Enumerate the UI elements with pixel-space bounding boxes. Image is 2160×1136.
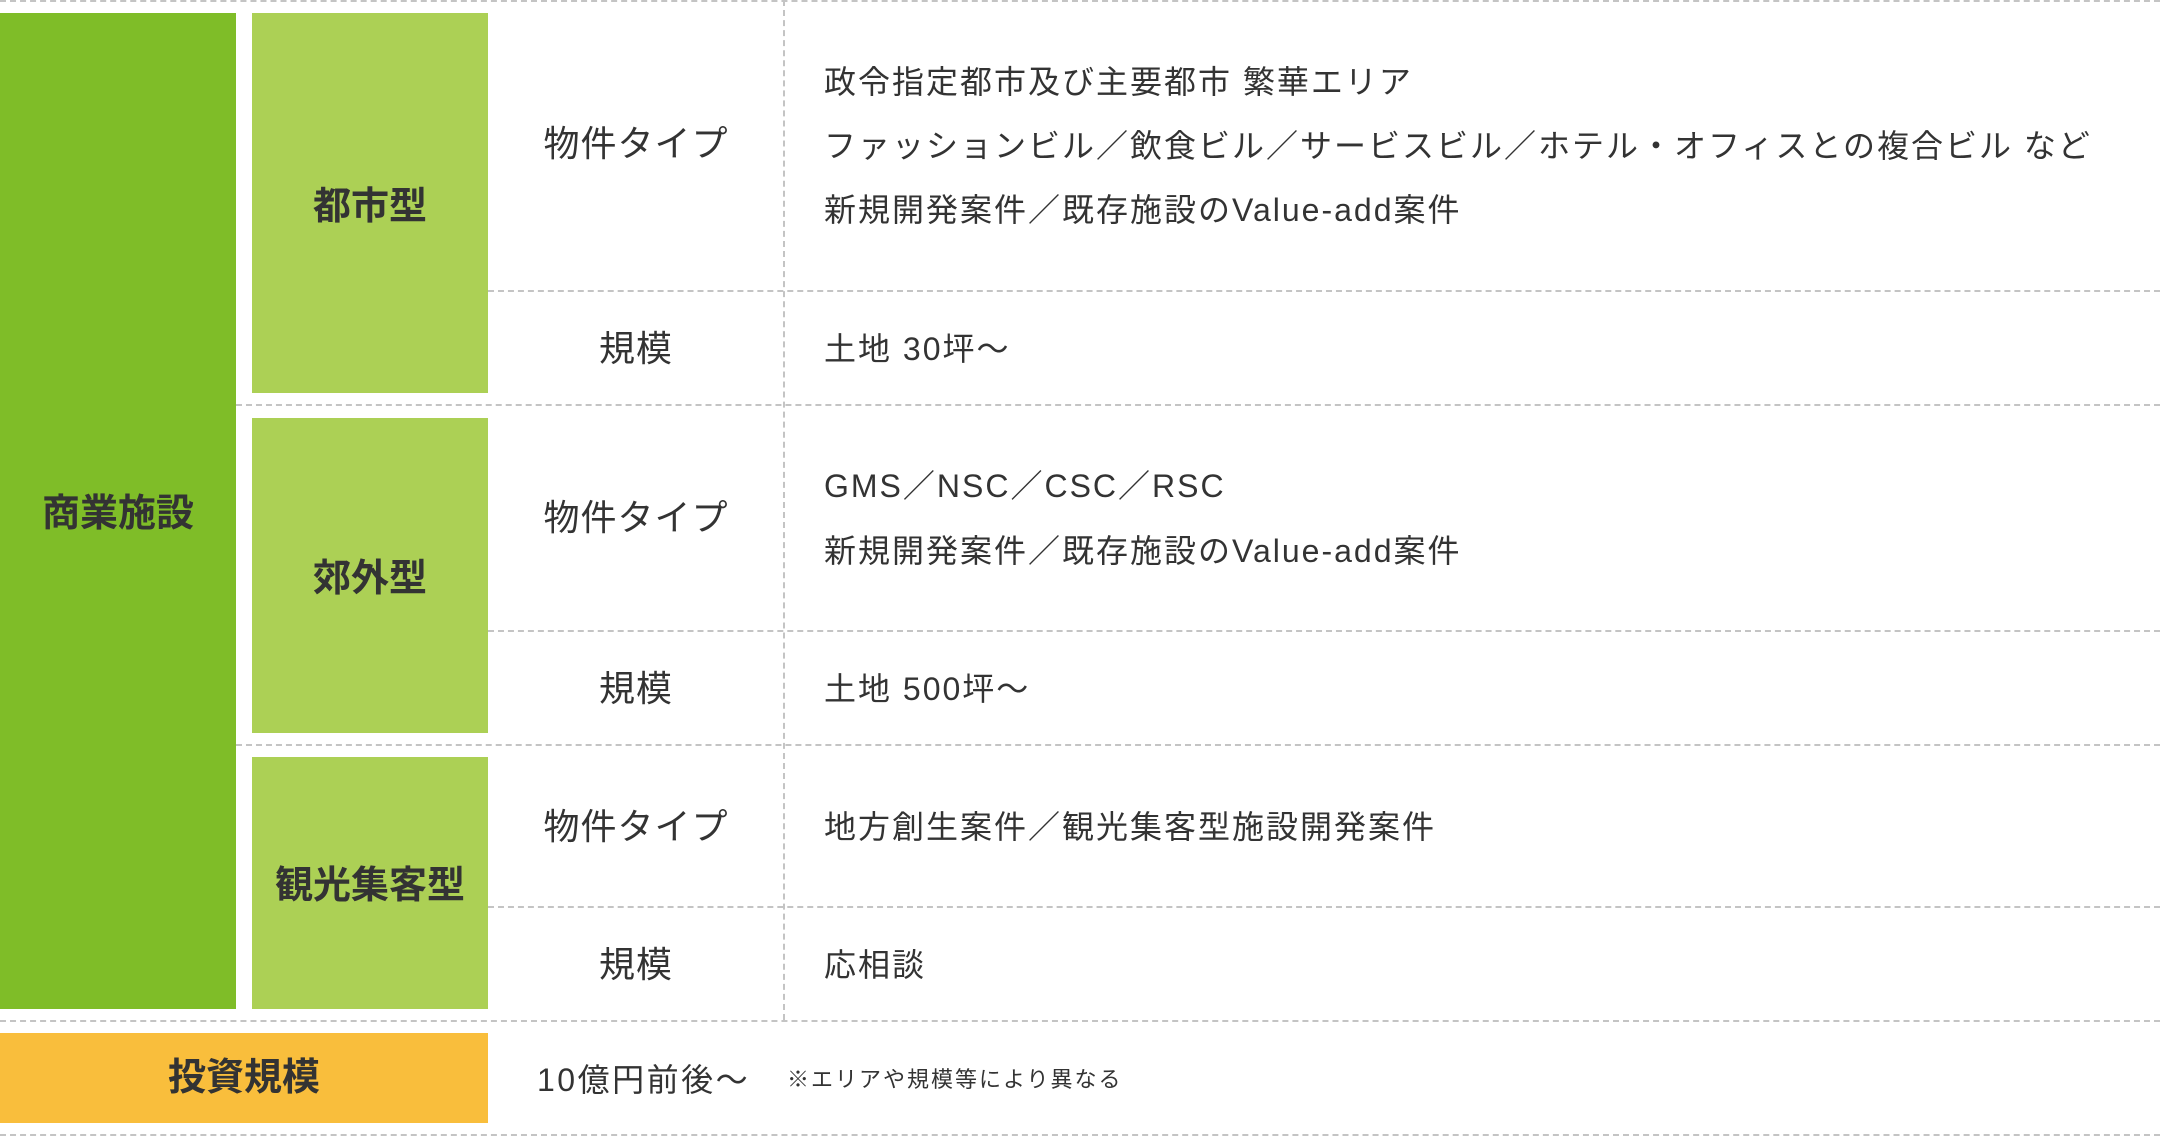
panel: urban type: 都市型	[313, 186, 427, 228]
content: scale 2: 土地 500坪～	[824, 671, 1030, 707]
content: scale 1: 土地 30坪～	[824, 331, 1010, 367]
panel: investment scale	[0, 1033, 488, 1123]
content: urban property: 政令指定都市及び主要都市 繁華エリア	[824, 64, 1413, 100]
label: scale 1: 規模	[599, 328, 673, 369]
note: ※エリアや規模等により異なる	[787, 1067, 1123, 1092]
panel: investment scale: 投資規模	[168, 1057, 320, 1099]
content: suburban property: GMS／NSC／CSC／RSC	[824, 468, 1226, 504]
panel: suburban type: 郊外型	[313, 558, 427, 600]
panel: urban type	[252, 13, 488, 393]
content: tourism property: 地方創生案件／観光集客型施設開発案件	[824, 809, 1436, 845]
content: urban property: ファッションビル／飲食ビル／サービスビル／ホテル・オフィスとの複合ビル など	[824, 128, 2092, 164]
label: scale 3: 規模	[599, 944, 673, 985]
content: urban property: 新規開発案件／既存施設のValue-add案件	[824, 192, 1462, 228]
panel: suburban type	[252, 418, 488, 733]
panel: tourism type	[252, 757, 488, 1009]
panel: commercial facilities	[0, 13, 236, 1009]
content: investment amount: 10億円前後～	[537, 1062, 750, 1098]
label: property type 3: 物件タイプ	[543, 806, 728, 847]
label: property type 1: 物件タイプ	[543, 123, 728, 164]
panel: tourism type: 観光集客型	[275, 865, 465, 907]
panel: commercial facilities: 商業施設	[42, 493, 194, 535]
content: scale 3: 応相談	[824, 947, 926, 983]
content: suburban property	[824, 468, 1462, 569]
label: property type 2: 物件タイプ	[543, 497, 728, 538]
label: scale 2: 規模	[599, 668, 673, 709]
content: urban property	[824, 64, 2092, 228]
content: suburban property: 新規開発案件／既存施設のValue-add案件	[824, 533, 1462, 569]
